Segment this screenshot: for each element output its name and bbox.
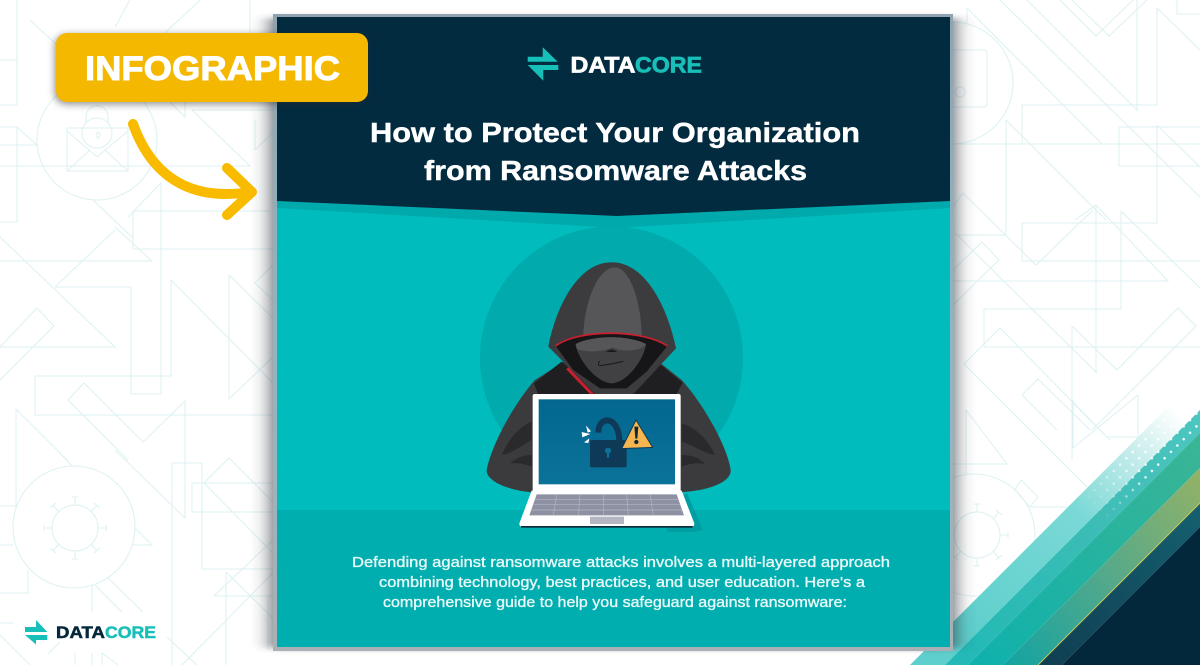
- warning triangle icon: [622, 420, 653, 449]
- hood opening: [556, 334, 667, 388]
- curved arrow: [133, 124, 252, 215]
- teal circle behind hacker: [480, 226, 743, 490]
- footer logo: [25, 620, 156, 644]
- hoodie body: [487, 360, 731, 492]
- lower teal panel: [277, 510, 950, 647]
- laptop screen: [539, 399, 675, 484]
- infographic badge: [56, 33, 368, 102]
- teal chevron band: [277, 200, 950, 228]
- keyboard: [529, 494, 684, 515]
- corner diagonal stripes: [910, 410, 1200, 665]
- card teal background: [277, 17, 950, 647]
- virus emblem left: [13, 466, 135, 588]
- laptop lid: [533, 394, 681, 492]
- hood: [548, 262, 676, 394]
- nose and mouth: [606, 350, 617, 352]
- intro paragraph: combining technology, best practices, and user education. Here's a: [379, 574, 866, 591]
- header logo: [528, 47, 702, 81]
- visor shade: [576, 337, 646, 351]
- face: [576, 337, 646, 383]
- laptop shadow: [660, 493, 703, 532]
- touchpad: [590, 517, 624, 524]
- dark header: [277, 17, 950, 216]
- virus emblem right: [913, 474, 1035, 596]
- open padlock icon: [582, 420, 627, 467]
- footer logo: CORE: [105, 624, 156, 642]
- red hood trim: [556, 333, 667, 346]
- intro paragraph: [352, 554, 890, 611]
- infographic card: [272, 14, 954, 651]
- hacker illustration: [487, 262, 731, 528]
- title: How to Protect Your Organization: [370, 117, 860, 148]
- lock circle emblem right: [891, 22, 1013, 144]
- card shadow: [272, 18, 954, 648]
- title: [370, 117, 860, 186]
- intro paragraph: Defending against ransomware attacks involves a multi-layered approach: [352, 554, 890, 571]
- lock circle emblem: [37, 80, 157, 200]
- intro paragraph: comprehensive guide to help you safeguard against ransomware:: [383, 594, 847, 611]
- header logo: CORE: [635, 52, 702, 77]
- hood highlight: [583, 267, 642, 337]
- laptop base: [519, 491, 694, 527]
- header logo: DATA: [570, 52, 636, 77]
- card frame: [273, 14, 953, 651]
- base edge: [521, 526, 693, 528]
- footer logo: DATA: [56, 624, 105, 642]
- shoulder shadows: [534, 362, 683, 395]
- red collar trim: [567, 368, 593, 395]
- title: from Ransomware Attacks: [424, 155, 807, 186]
- sleeve folds: [502, 422, 715, 467]
- infographic badge: INFOGRAPHIC: [85, 50, 340, 88]
